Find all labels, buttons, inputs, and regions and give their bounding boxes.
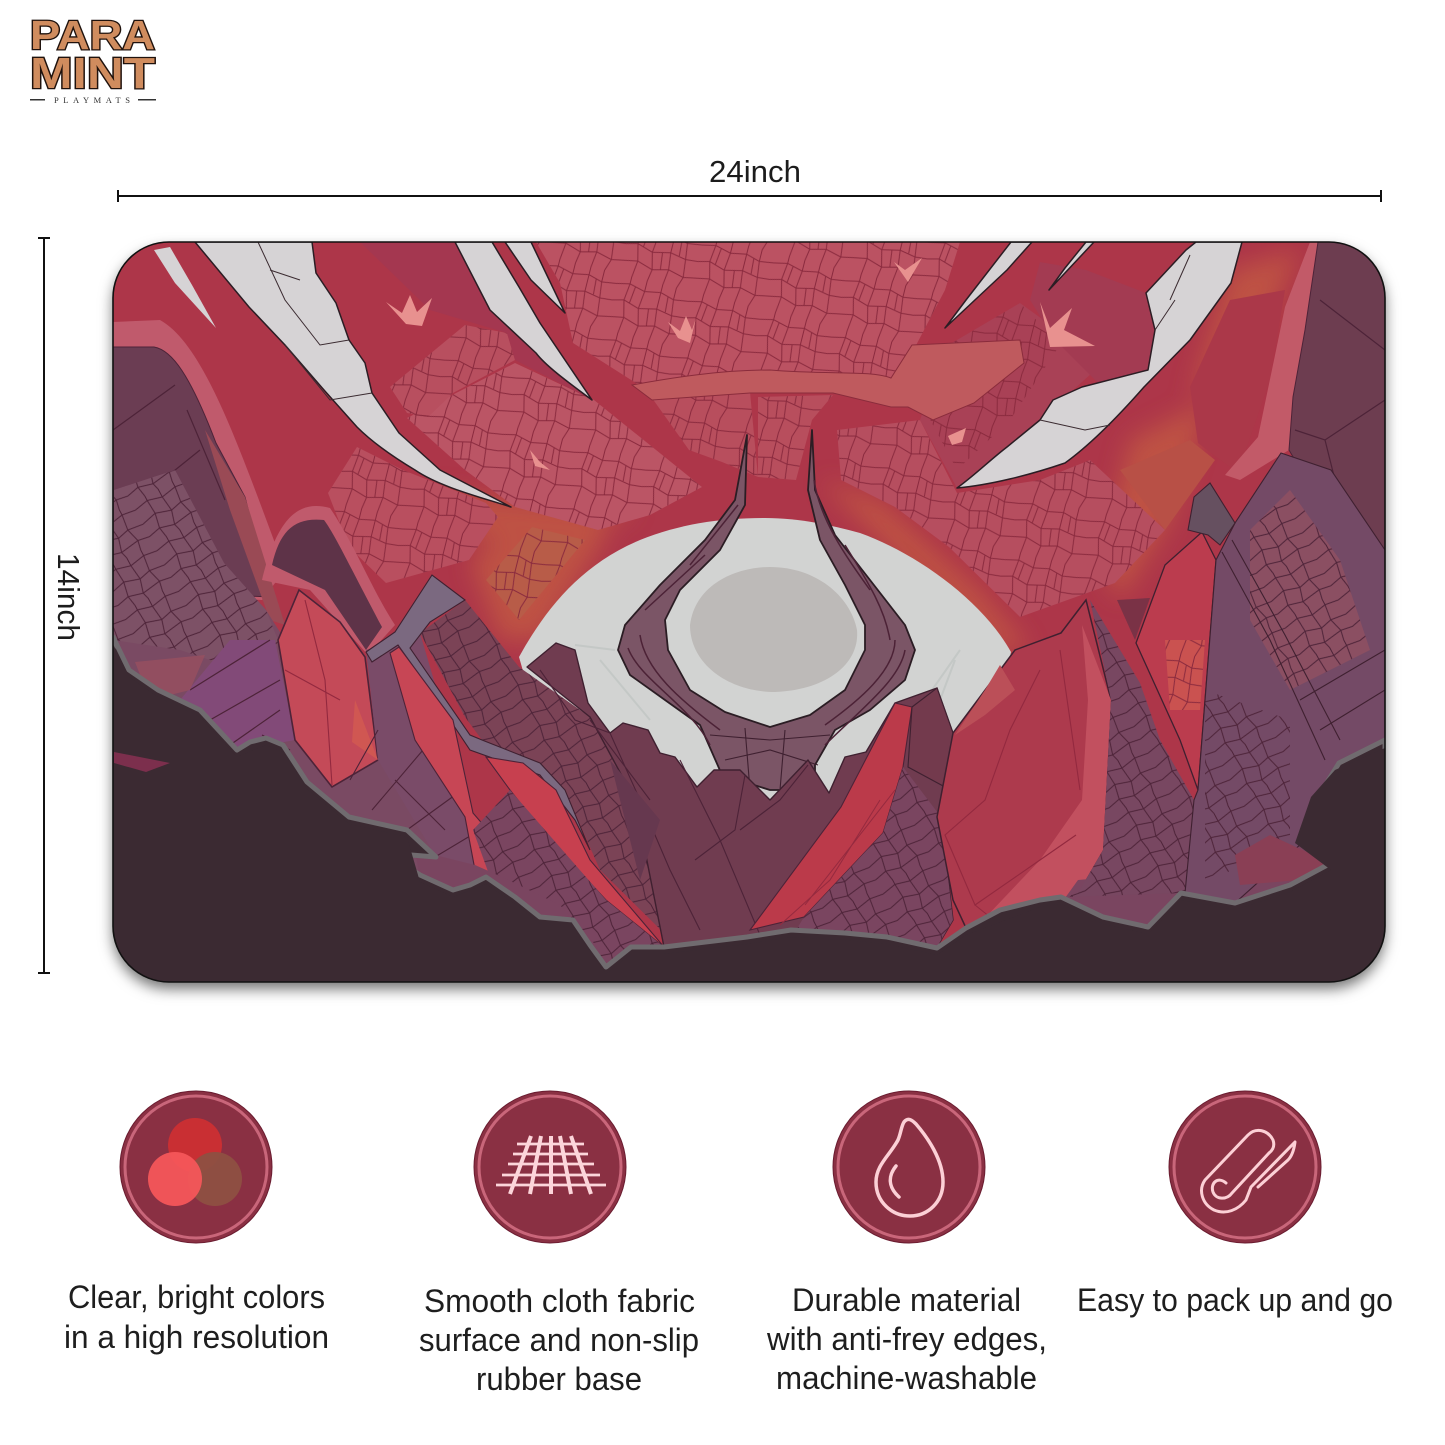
sky base: [114, 242, 1310, 944]
caption: portability: Easy to pack up and go: [1077, 1282, 1393, 1318]
caption: durability: [766, 1282, 1047, 1396]
logo: Para Mint Playmats: MINT: [30, 49, 155, 98]
upper pink brick regions: [328, 242, 1215, 620]
icon: rolled mat badge: [1169, 1091, 1321, 1243]
violet mountain strips: [350, 575, 664, 933]
pale bird marks: [386, 258, 1095, 470]
dark foreground: [113, 637, 1385, 982]
caption: colors: Clear, bright colors: [68, 1279, 325, 1315]
height dimension: 14inch: 14inch: [51, 553, 86, 641]
orange glow areas: [420, 250, 1300, 650]
icon: colour circles badge: [120, 1091, 272, 1243]
white moon: [519, 518, 1011, 800]
logo: Para Mint Playmats: [30, 12, 156, 105]
caption: durability: Durable material: [792, 1282, 1021, 1318]
caption: durability: machine-washable: [776, 1360, 1037, 1396]
width dimension: 24inch: [118, 154, 1381, 202]
white claws: [154, 242, 1242, 507]
icon: water drop badge: [833, 1091, 985, 1243]
caption: colors: [64, 1279, 329, 1355]
left purple fill above the ridge: [430, 859, 594, 944]
big right red crystal: [937, 600, 1111, 928]
playmat illustration: [113, 242, 1385, 982]
claw crack lines: [258, 242, 1190, 430]
width dimension: 24inch: 24inch: [709, 154, 801, 189]
dark purple rock, left: [113, 320, 395, 655]
left red pillar: [278, 590, 378, 787]
logo: Para Mint Playmats: PARA: [30, 12, 155, 58]
caption: fabric: [419, 1283, 699, 1397]
dark purple rock, right: [1193, 242, 1384, 548]
purple left mountain base: [114, 470, 432, 871]
brick crack textures: [328, 242, 1165, 620]
moon faint wings: [575, 645, 960, 720]
caption: fabric: surface and non-slip: [419, 1322, 699, 1358]
dark plum centre mountains: [527, 643, 953, 947]
centre red strips: [390, 647, 664, 965]
horned eye: [618, 430, 915, 790]
logo: Para Mint Playmats: PLAYMATS: [54, 95, 130, 105]
right mountains: [1060, 453, 1385, 935]
caption: fabric: rubber base: [476, 1361, 642, 1397]
height dimension: 14inch: [38, 238, 86, 973]
caption: fabric: Smooth cloth fabric: [424, 1283, 695, 1319]
caption: colors: in a high resolution: [64, 1319, 329, 1355]
caption: durability: with anti-frey edges,: [766, 1321, 1047, 1357]
icon: fabric grid badge: [474, 1091, 626, 1243]
stone band across top: [632, 340, 1024, 420]
